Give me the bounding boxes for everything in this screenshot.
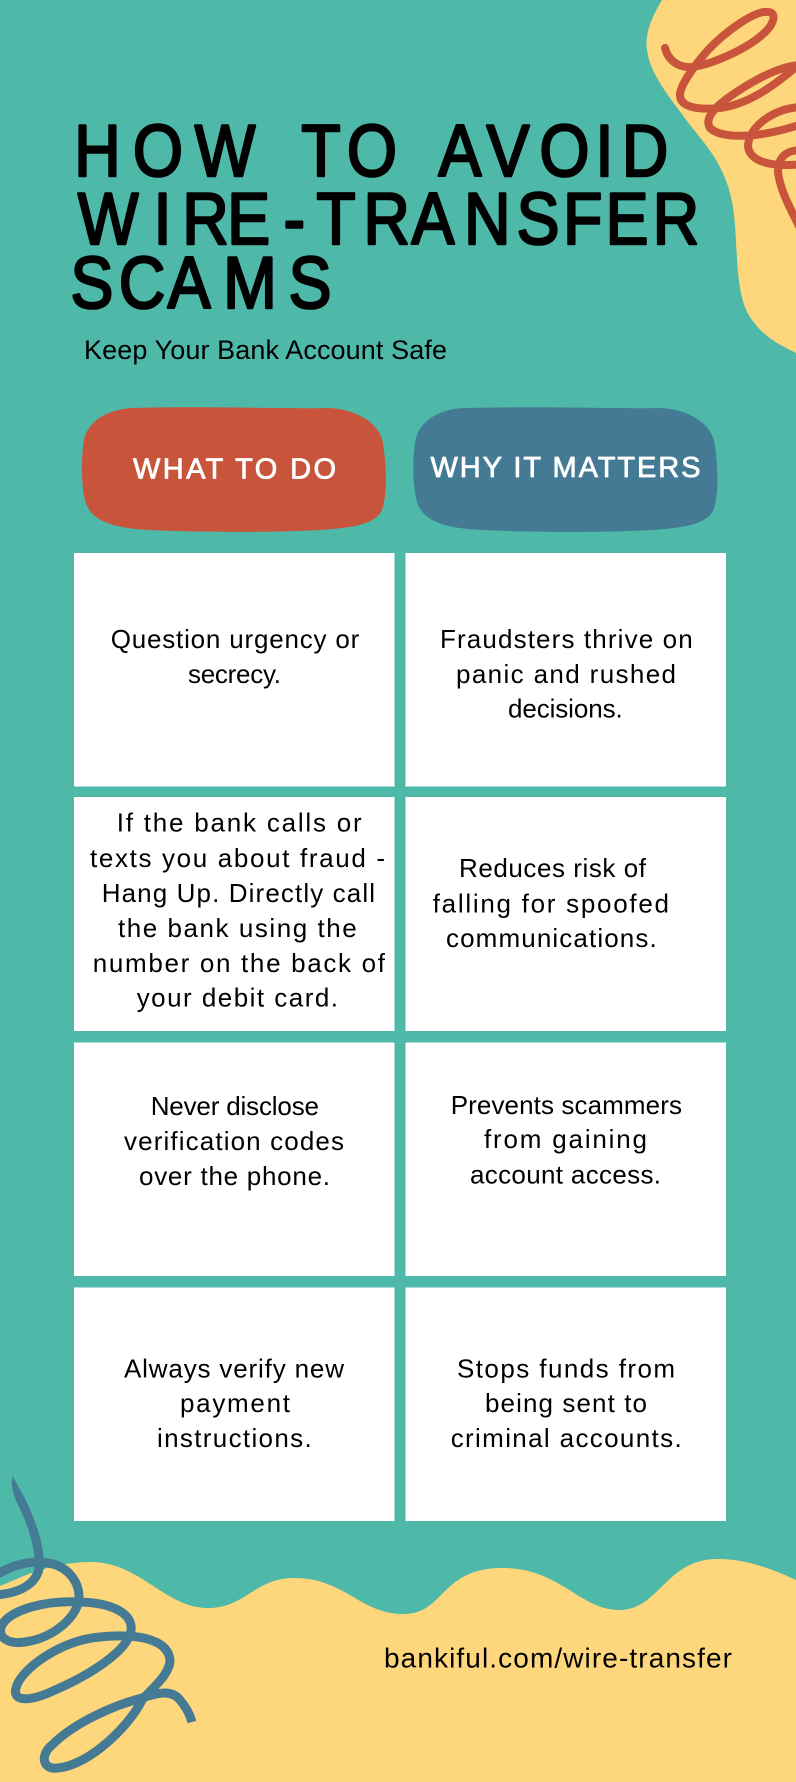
- row 2 left cell: the bank using the: [118, 913, 357, 943]
- row 2 right cell: [406, 797, 726, 1031]
- row 4 left cell: instructions.: [157, 1423, 312, 1453]
- row 4 right cell: [406, 1288, 726, 1521]
- row 4 left cell: [74, 1288, 394, 1521]
- row 3 left cell: verification codes: [124, 1126, 344, 1156]
- row 2 right cell: Reduces risk of: [459, 853, 647, 883]
- row 1 right cell: Fraudsters thrive on: [440, 624, 693, 654]
- row 3 right cell: Prevents scammers: [451, 1090, 682, 1120]
- row 1 left cell: Question urgency or: [111, 624, 360, 654]
- header: why it matters: WHY IT MATTERS: [430, 452, 700, 484]
- row 4 right cell: criminal accounts.: [451, 1423, 682, 1453]
- row 3 right cell: [406, 1042, 726, 1276]
- title: WIRE-TRANSFER: [78, 178, 699, 260]
- row 2 right cell: communications.: [446, 923, 657, 953]
- blue squiggle: bottom left: [0, 1476, 192, 1768]
- row 4 left cell: Always verify new: [124, 1354, 344, 1384]
- row 3 right cell: from gaining: [484, 1124, 647, 1154]
- row 1 right cell: panic and rushed: [456, 659, 676, 689]
- title: SCAMS: [71, 242, 331, 324]
- yellow blob: top right: [647, 0, 796, 353]
- row 2 left cell: [74, 797, 394, 1031]
- title: [71, 110, 699, 324]
- header: what to do: WHAT TO DO: [133, 454, 336, 486]
- row 2 left cell: number on the back of: [93, 948, 386, 978]
- subtitle: Keep Your Bank Account Safe: [84, 335, 447, 365]
- row 3 left cell: Never disclose: [151, 1091, 319, 1121]
- row 1 right cell: decisions.: [508, 694, 623, 724]
- row 4 right cell: Stops funds from: [457, 1354, 675, 1384]
- red squiggle: top right: [665, 12, 796, 232]
- row 2 left cell: your debit card.: [137, 983, 338, 1013]
- row 2 left cell: Hang Up. Directly call: [102, 878, 375, 908]
- row 3 right cell: account access.: [470, 1160, 661, 1190]
- row 4 left cell: payment: [180, 1388, 291, 1418]
- row 3 left cell: over the phone.: [139, 1161, 330, 1191]
- website url: bankiful.com/wire-transfer: [384, 1643, 732, 1674]
- header: why it matters: [413, 407, 717, 532]
- row 4 right cell: being sent to: [485, 1388, 647, 1418]
- row 1 right cell: [406, 553, 726, 786]
- row 1 left cell: secrecy.: [188, 659, 281, 689]
- header: what to do: [82, 407, 386, 532]
- title: HOW TO AVOID: [74, 110, 668, 192]
- row 2 left cell: If the bank calls or: [117, 808, 362, 838]
- yellow wave: bottom: [0, 1559, 796, 1782]
- row 1 left cell: [74, 553, 394, 786]
- row 3 left cell: [74, 1042, 394, 1276]
- row 2 left cell: texts you about fraud -: [90, 843, 385, 873]
- row 2 right cell: falling for spoofed: [433, 889, 669, 919]
